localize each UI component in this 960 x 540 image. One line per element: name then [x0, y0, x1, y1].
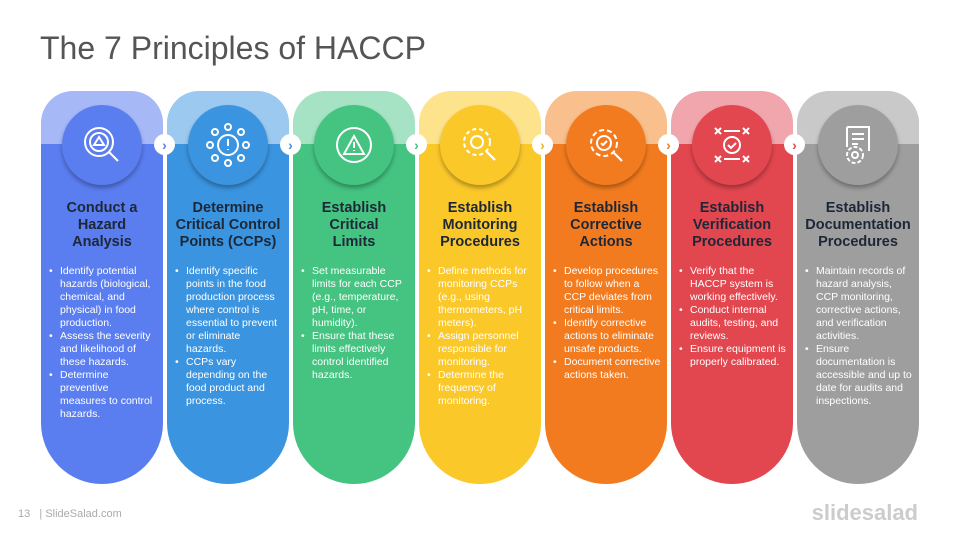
heading [176, 200, 280, 250]
arrow: › [414, 136, 419, 152]
bullets: Document corrective actions taken. [564, 356, 660, 381]
bullets: Identify corrective actions to eliminate unsafe products. [564, 317, 654, 355]
panel: principle 5 [545, 91, 667, 484]
arrow [532, 134, 553, 155]
heading: Establish [574, 200, 638, 216]
footer: 13 | SlideSalad.com [18, 508, 122, 520]
bullets: Determine the frequency of monitoring. [438, 369, 504, 407]
panel: principle 2 [167, 91, 289, 484]
heading: Verification [693, 217, 771, 233]
icon: limits gauge [314, 105, 394, 185]
bullets: CCPs vary depending on the food product and process. [186, 356, 267, 407]
arrow [658, 134, 679, 155]
arrow [154, 134, 175, 155]
heading: Establish [448, 200, 512, 216]
bullets: Assess the severity and likelihood of these hazards. [60, 330, 150, 368]
heading: Procedures [818, 234, 898, 250]
heading [440, 200, 520, 250]
panel: principle 1 [41, 91, 163, 484]
arrow: › [666, 136, 671, 152]
heading [67, 200, 138, 250]
bullets: Ensure that these limits effectively control identified hazards. [312, 330, 394, 381]
panel: principle 3 [293, 91, 415, 484]
arrow: › [540, 136, 545, 152]
icon: documentation [818, 105, 898, 185]
bullets: Develop procedures to follow when a CCP deviates from critical limits. [564, 265, 658, 316]
arrow [280, 134, 301, 155]
arrow [784, 134, 805, 155]
heading: Establish [826, 200, 890, 216]
heading: Actions [579, 234, 633, 250]
panel: principle 7 [797, 91, 919, 484]
bullets: Ensure equipment is properly calibrated. [690, 343, 786, 368]
bullets: Verify that the HACCP system is working effectively. [690, 265, 778, 303]
bullets: Set measurable limits for each CCP (e.g., temperature, pH, time, or humidity). [312, 265, 402, 329]
heading: Limits [333, 234, 375, 250]
panel: principle 4 [419, 91, 541, 484]
bullets [679, 265, 786, 368]
bullets: Ensure documentation is accessible and up to date for audits and inspections. [816, 343, 912, 407]
arrow: › [288, 136, 293, 152]
arrow: › [792, 136, 797, 152]
heading: Documentation [805, 217, 911, 233]
heading [805, 200, 911, 250]
bullets [175, 265, 277, 407]
heading [322, 200, 386, 250]
heading [570, 200, 642, 250]
icon: corrective gear [566, 105, 646, 185]
heading: Procedures [440, 234, 520, 250]
bullets [49, 265, 152, 420]
bullets [805, 265, 912, 407]
icon: control points [188, 105, 268, 185]
icon: monitoring [440, 105, 520, 185]
heading: Monitoring [443, 217, 517, 233]
bullets: Assign personnel responsible for monitoring. [438, 330, 519, 368]
bullets: Identify specific points in the food production process where control is essential to prevent or eliminate hazards. [186, 265, 277, 355]
title: The 7 Principles of HACCP [40, 30, 426, 66]
heading: Corrective [570, 217, 642, 233]
arrow [406, 134, 427, 155]
heading: Establish [700, 200, 764, 216]
bullets: Define methods for monitoring CCPs (e.g., using thermometers, pH meters). [438, 265, 527, 329]
bullets [427, 265, 527, 407]
heading: Hazard [78, 217, 126, 233]
icon: verification [692, 105, 772, 185]
bullets [301, 265, 402, 381]
bullets: Identify potential hazards (biological, chemical, and physical) in food production. [60, 265, 150, 329]
heading: Critical [329, 217, 379, 233]
heading: Procedures [692, 234, 772, 250]
bullets: Determine preventive measures to control hazards. [60, 369, 152, 420]
arrow: › [162, 136, 167, 152]
icon: hazard magnifier [62, 105, 142, 185]
bullets: Conduct internal audits, testing, and reviews. [690, 304, 778, 342]
heading: Critical Control [176, 217, 280, 233]
bullets [553, 265, 660, 381]
heading: Establish [322, 200, 386, 216]
panel: principle 6 [671, 91, 793, 484]
bullets: Maintain records of hazard analysis, CCP monitoring, corrective actions, and verification activities. [816, 265, 905, 342]
heading: Analysis [72, 234, 132, 250]
heading: Conduct a [67, 200, 137, 216]
heading [692, 200, 772, 250]
heading: Points (CCPs) [180, 234, 276, 250]
heading: Determine [193, 200, 263, 216]
logo: slidesalad [812, 500, 918, 525]
